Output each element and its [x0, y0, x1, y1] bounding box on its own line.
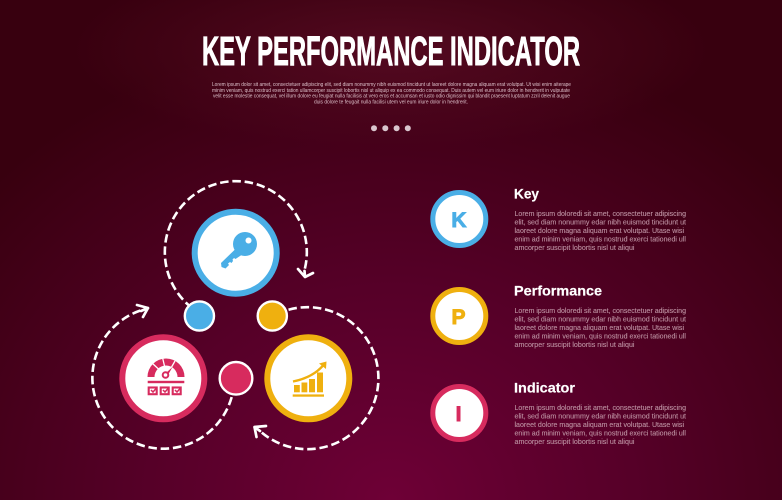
- pagination dots: [371, 125, 411, 131]
- red connector dot: [220, 362, 252, 395]
- key circle: [195, 212, 277, 294]
- panel: key: [433, 186, 686, 252]
- text block: indicator: elit, sed diam nonummy edar nibh euismod tincidunt ut: [514, 412, 686, 421]
- badge: K: K: [451, 209, 467, 232]
- yellow connector dot: [258, 301, 287, 331]
- text block: performance: elit, sed diam nonummy edar nibh euismod tincidunt ut: [514, 315, 686, 324]
- text block: performance: Lorem ipsum doloredi sit amet, consectetuer adipiscing: [514, 306, 686, 315]
- panel: performance: [433, 282, 686, 349]
- icon: growth chart: [293, 362, 326, 397]
- text block: indicator: enim ad minim veniam, quis nostrud exerci tationedi ull: [514, 429, 686, 438]
- text block: key: Lorem ipsum doloredi sit amet, consectetuer adipiscing: [514, 209, 686, 218]
- dashed arrow: key loop: [165, 181, 313, 308]
- text block: performance: laoreet dolore magna aliquam erat volutpat. Utase wisi: [514, 323, 684, 332]
- badge: K: [433, 192, 486, 246]
- heading: Key: Key: [514, 186, 539, 202]
- badge: I: [433, 386, 486, 440]
- cycle diagram: [92, 181, 378, 449]
- heading: Indicator: Indicator: [514, 380, 576, 396]
- panel: indicator: [433, 380, 686, 446]
- dashed arrow: performance loop: [254, 307, 378, 449]
- heading: Performance: Performance: [514, 282, 602, 298]
- intro text block: duis dolore te feugait nulla facilisi utem vel eum iriure dolor in hendrerit.: [314, 100, 468, 106]
- intro text block: velit esse molestie consequat, vel illum dolore eu feugiat nulla facilisis at vero eros et accumsan et iusto odio dignissim qui blandit praesent luptatum zzril delenit augue: [213, 94, 570, 100]
- icon: key: [221, 232, 257, 268]
- text block: key: [514, 209, 686, 252]
- indicator circle: [122, 337, 204, 419]
- badge: I: I: [456, 403, 461, 426]
- dashed arrow: indicator loop: [92, 305, 234, 449]
- intro text block: Lorem ipsum dolor sit amet, consectetuer adipiscing elit, sed diam nonummy nibh euismod tincidunt ut laoreet dolore magna aliquam erat volutpat. Ut wisi enim aiterape: [212, 82, 571, 88]
- text block: indicator: [514, 403, 686, 446]
- icon: gauge with checkboxes: [148, 358, 184, 394]
- text block: key: amcorper suscipit lobortis nisl ut aliqui: [514, 243, 635, 252]
- text block: key: laoreet dolore magna aliquam erat volutpat. Utase wisi: [514, 226, 684, 235]
- badge: P: P: [451, 306, 466, 329]
- text block: performance: amcorper suscipit lobortis nisl ut aliqui: [514, 340, 635, 349]
- text block: performance: [514, 306, 686, 349]
- badge: P: [433, 290, 486, 342]
- text block: indicator: Lorem ipsum doloredi sit amet, consectetuer adipiscing: [514, 403, 686, 412]
- text block: key: elit, sed diam nonummy edar nibh euismod tincidunt ut: [514, 218, 686, 227]
- text block: performance: enim ad minim veniam, quis nostrud exerci tationedi ull: [514, 332, 686, 341]
- intro text block: [212, 82, 571, 106]
- blue connector dot: [185, 301, 214, 331]
- intro text block: minim veniam, quis nostrud exerci tation ullamcorper suscipit lobortis nisl ut aliquip ex ea commodo consequat. Duis autem vel eum iriure dolor in hendrerit in vulputate: [212, 88, 570, 94]
- text block: indicator: amcorper suscipit lobortis nisl ut aliqui: [514, 437, 635, 446]
- text block: key: enim ad minim veniam, quis nostrud exerci tationedi ull: [514, 235, 686, 244]
- text block: indicator: laoreet dolore magna aliquam erat volutpat. Utase wisi: [514, 420, 684, 429]
- performance circle: [267, 337, 349, 419]
